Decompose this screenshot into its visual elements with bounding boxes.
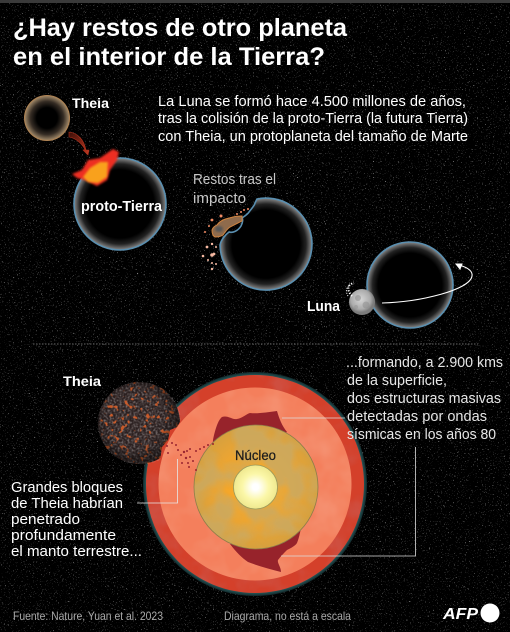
label: Theia (lower): Theia — [63, 373, 101, 389]
AFP logo: AFP — [442, 606, 478, 623]
text: formando — [346, 354, 503, 443]
AFP logo — [442, 604, 500, 623]
debris cloud after impact — [202, 208, 249, 270]
intro text block — [158, 93, 468, 145]
inner core — [234, 465, 278, 509]
title: en el interior de la Tierra? — [13, 43, 325, 71]
label: Restos tras el impacto: Restos tras el — [193, 171, 276, 188]
outer core — [194, 425, 318, 549]
callout line: Theia blocks — [137, 459, 178, 503]
intro text block: La Luna se formó hace 4.500 millones de años, — [158, 93, 466, 110]
icon: Moon — [347, 283, 375, 315]
text: formando: dos estructuras masivas — [347, 390, 501, 407]
text: Grandes bloques: Grandes bloques — [11, 479, 123, 496]
title — [13, 14, 348, 71]
text: formando: de la superficie, — [347, 372, 447, 389]
text: Grandes bloques: de Theia habrían — [11, 495, 123, 512]
text: formando: ...formando, a 2.900 kms — [346, 354, 503, 371]
intro text block: con Theia, un protoplaneta del tamaño de Marte — [158, 128, 468, 145]
text: Grandes bloques: el manto terrestre... — [11, 543, 142, 560]
text: Grandes bloques: penetrado — [11, 511, 80, 528]
callout lines: large structures — [281, 418, 416, 556]
label: Theia: Theia — [72, 95, 109, 111]
label: Restos tras el impacto — [193, 171, 276, 207]
intro text block: tras la colisión de la proto-Tierra (la futura Tierra) — [158, 110, 468, 127]
planet: Earth with Moon — [367, 242, 453, 328]
planet: proto-Earth — [74, 158, 166, 250]
planet: Theia rocky — [98, 382, 182, 466]
title: ¿Hay restos de otro planeta — [13, 14, 348, 42]
label: Restos tras el impacto: impacto — [193, 190, 246, 207]
label: Luna: Luna — [307, 298, 341, 315]
text: Grandes bloques — [11, 479, 142, 560]
impact explosion — [72, 149, 119, 186]
arrow: Theia to proto-Earth — [69, 132, 89, 155]
label: proto-Tierra: proto-Tierra — [81, 198, 163, 215]
divider — [33, 343, 478, 345]
scale note: Diagrama, no está a escala — [224, 609, 351, 623]
inner mantle — [158, 387, 352, 581]
fragments of Theia in mantle — [166, 442, 214, 471]
upper large structure — [212, 411, 287, 455]
text: formando: sísmicas en los años 80 — [347, 426, 496, 443]
outer mantle — [146, 375, 364, 593]
Earth cross-section — [143, 372, 367, 596]
icon: Theia small planet — [24, 95, 70, 141]
arrow: Moon orbit — [382, 264, 472, 303]
planet: impacted Earth — [220, 198, 312, 290]
label: Núcleo: Núcleo — [235, 448, 276, 463]
text: formando: detectadas por ondas — [347, 408, 487, 425]
source: Fuente: Nature, Yuan et al. 2023 — [13, 609, 163, 623]
lower large structure — [230, 528, 301, 572]
text: Grandes bloques: profundamente — [11, 527, 116, 544]
